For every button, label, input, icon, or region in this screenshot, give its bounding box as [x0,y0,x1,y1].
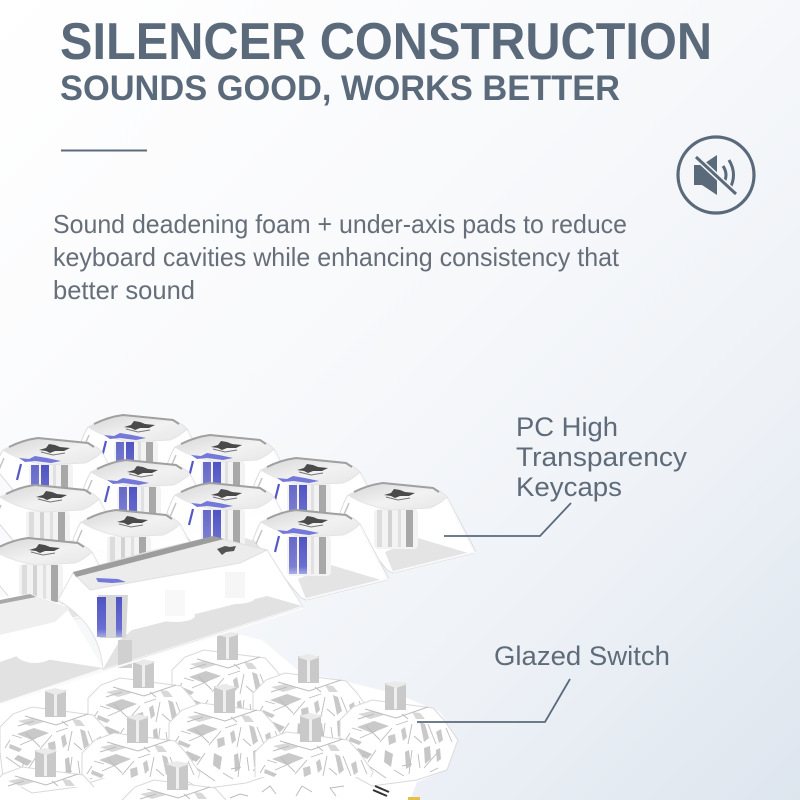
glazed switches illustration [0,631,458,800]
description text: keyboard cavities while enhancing consistency that [53,242,620,272]
transparent keycaps illustration [0,415,475,704]
wide keycap [58,536,303,670]
label: keycaps [516,412,688,502]
label: switch: Glazed Switch [494,641,670,671]
short rule [61,150,147,152]
leader line: keycaps [444,503,571,536]
label: keycaps: PC High [516,412,618,442]
title: SILENCER CONSTRUCTION [60,13,712,71]
subtitle: SOUNDS GOOD, WORKS BETTER [60,69,620,108]
label: keycaps: Keycaps [516,472,622,502]
description text [53,209,627,305]
description text: better sound [53,275,195,305]
icon: muted speaker [678,137,754,213]
label: keycaps: Transparency [516,442,688,472]
leader line: switch [417,679,570,722]
front-left keycap [0,594,103,703]
description text: Sound deadening foam + under-axis pads to reduce [53,209,627,239]
